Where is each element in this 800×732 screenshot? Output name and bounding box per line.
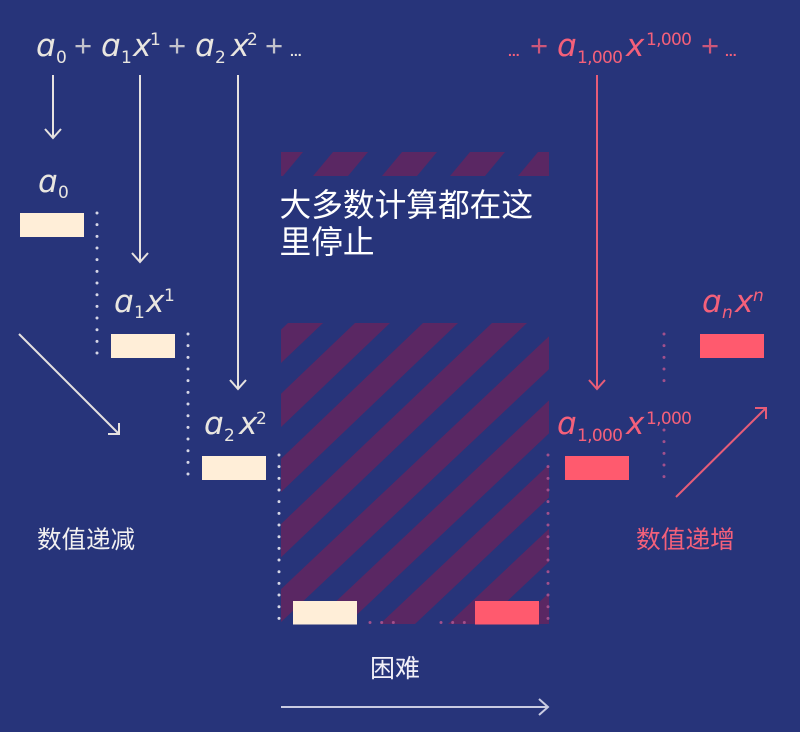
term label: a1000x1000: x [625, 406, 645, 442]
term label: anxn: n [722, 303, 733, 323]
formula: decreasing terms: ɑ [195, 28, 215, 64]
formula: increasing terms [508, 28, 737, 68]
term label: anxn: n [753, 286, 764, 306]
formula: decreasing terms: 1 [150, 30, 161, 50]
formula: decreasing terms [36, 28, 302, 68]
term label: a1x1: 1 [134, 303, 145, 323]
formula: decreasing terms: ɑ [101, 28, 121, 64]
arrow: increasing diagonal [676, 408, 766, 497]
term label: a0: ɑ [38, 164, 58, 200]
bar: a2x2 [202, 456, 266, 480]
formula: increasing terms: + [530, 28, 548, 63]
term label: a0 [38, 164, 69, 203]
arrow: decreasing diagonal [19, 334, 119, 434]
formula: increasing terms: 1,000 [646, 30, 692, 50]
label: values increase: 数值递增 [636, 526, 735, 554]
formula: increasing terms: + [701, 28, 719, 63]
term label: a1x1: 1 [164, 286, 175, 306]
formula: decreasing terms: + [168, 28, 186, 63]
term label: a2x2: 2 [256, 409, 267, 429]
arrow: a1 down [132, 75, 148, 262]
formula: increasing terms: ɑ [557, 28, 577, 64]
arrow: difficulty axis [281, 699, 548, 715]
term label: anxn [702, 284, 764, 323]
formula: decreasing terms: x [230, 28, 250, 64]
formula: decreasing terms: 1 [121, 48, 132, 68]
term label: a2x2: x [238, 406, 258, 442]
term label: a1000x1000 [557, 406, 692, 446]
formula: increasing terms: ... [725, 43, 737, 59]
label: values decrease: 数值递减 [37, 526, 135, 554]
formula: decreasing terms: + [74, 28, 92, 63]
term label: a1x1 [114, 284, 175, 323]
term label: a1x1: x [145, 284, 165, 320]
bar: a1000x1000 [565, 456, 629, 480]
arrow: a0 down [45, 75, 61, 138]
term label: a2x2 [204, 406, 267, 446]
heading: most calculations stop here: 里停止 [280, 224, 375, 260]
term label: a1000x1000: 1,000 [646, 409, 692, 429]
bar: difficult low term [293, 601, 357, 624]
formula: increasing terms: ... [508, 43, 520, 59]
formula: decreasing terms: 2 [215, 48, 226, 68]
term label: a1x1: ɑ [114, 284, 134, 320]
formula: increasing terms: 1,000 [577, 48, 623, 68]
term label: anxn: ɑ [702, 284, 722, 320]
formula: increasing terms: x [625, 28, 645, 64]
bar: a1x1 [111, 334, 175, 358]
formula: decreasing terms: ɑ [36, 28, 56, 64]
arrow: a2 down [230, 75, 246, 389]
formula: decreasing terms: + [265, 28, 283, 63]
term label: anxn: x [734, 284, 754, 320]
heading: most calculations stop here: 大多数计算都在这 [280, 187, 533, 223]
bar: anxn [700, 334, 764, 358]
bar: difficult high term [475, 601, 539, 624]
term label: a0: 0 [58, 183, 69, 203]
label: difficulty: 困难 [370, 655, 420, 683]
hatched band: top [281, 152, 549, 176]
formula: decreasing terms: 2 [247, 30, 258, 50]
formula: decreasing terms: 0 [56, 48, 67, 68]
term label: a2x2: 2 [224, 426, 235, 446]
hatched region: main difficult zone [281, 323, 549, 624]
formula: decreasing terms: x [132, 28, 152, 64]
bar: a0 [20, 213, 84, 237]
arrow: a1000 down [589, 75, 605, 389]
term label: a1000x1000: ɑ [557, 406, 577, 442]
formula: decreasing terms: ... [290, 43, 302, 59]
term label: a1000x1000: 1,000 [577, 426, 623, 446]
term label: a2x2: ɑ [204, 406, 224, 442]
